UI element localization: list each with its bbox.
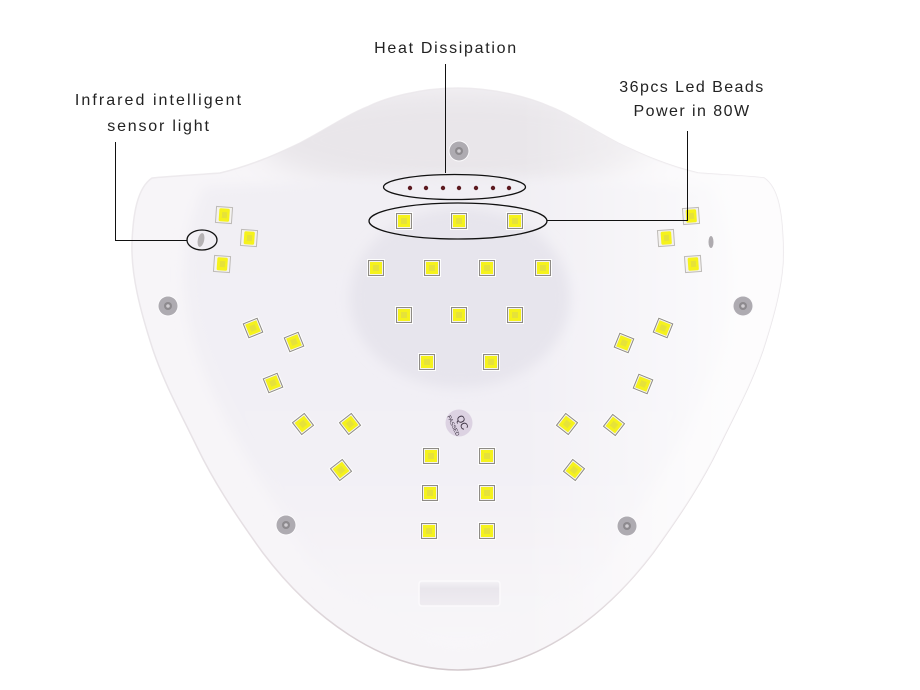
bottom handle notch [419, 581, 500, 606]
callout: heat dissipation: Heat Dissipation [374, 40, 518, 57]
callout: LED beads [369, 79, 765, 239]
QC passed sticker: QC [454, 414, 470, 432]
lamp body [132, 80, 800, 680]
callout: infrared sensor: sensor light [107, 118, 211, 135]
small indicator hole right [708, 236, 714, 248]
QC passed sticker [445, 410, 472, 437]
central recessed well [350, 208, 570, 388]
callout: infrared sensor: Infrared intelligent [75, 92, 243, 109]
callout: infrared sensor [75, 92, 243, 250]
heat dissipation holes [408, 186, 511, 190]
sensor window [196, 232, 206, 248]
screws [158, 140, 754, 536]
LED beads [213, 206, 702, 540]
QC passed sticker: PASSED [445, 415, 460, 437]
callout: LED beads: Power in 80W [634, 103, 750, 120]
callout: heat dissipation [374, 40, 526, 200]
callout: LED beads: 36pcs Led Beads [619, 79, 765, 96]
